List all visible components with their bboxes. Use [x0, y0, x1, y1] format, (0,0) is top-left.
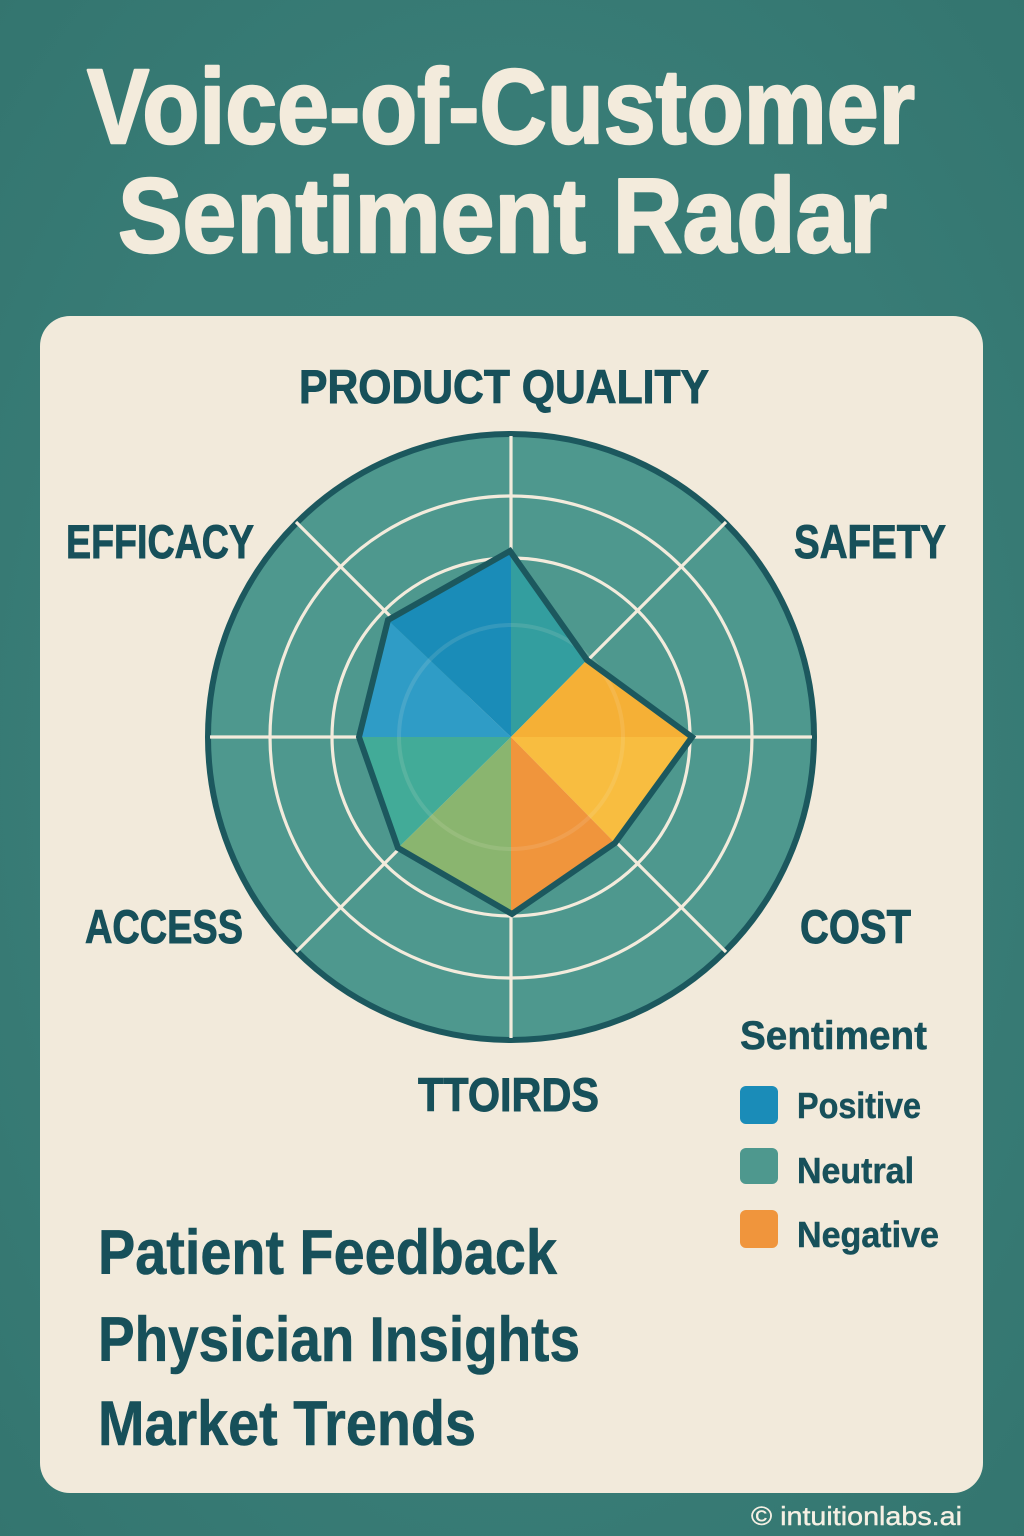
title: Voice-of-Customer	[87, 48, 915, 166]
axis labels: ACCESS	[85, 900, 243, 953]
data sources list: Physician Insights	[98, 1305, 580, 1375]
radar background disc	[208, 434, 814, 1040]
data sources list: Market Trends	[98, 1389, 476, 1459]
axis labels	[66, 360, 946, 1121]
faint inner ring	[399, 625, 623, 849]
legend item: negative	[740, 1210, 939, 1255]
legend item: neutral: Neutral	[797, 1150, 914, 1191]
title	[87, 48, 915, 275]
radar chart	[208, 434, 814, 1040]
axis labels: EFFICACY	[66, 515, 254, 568]
legend item: negative: Negative	[797, 1214, 939, 1255]
sentiment wedges	[359, 551, 692, 914]
footer credit: © intuitionlabs.ai	[751, 1501, 962, 1531]
axis labels: TTOIRDS	[418, 1068, 599, 1121]
legend item: neutral	[740, 1148, 914, 1191]
data sources list	[98, 1218, 580, 1459]
radar grid	[210, 436, 812, 1038]
legend	[740, 1014, 939, 1255]
axis labels: PRODUCT QUALITY	[299, 360, 709, 413]
data sources list: Patient Feedback	[98, 1218, 558, 1288]
axis labels: SAFETY	[794, 515, 946, 568]
axis labels: COST	[800, 900, 911, 953]
panel: radar card	[40, 316, 983, 1493]
legend title: Sentiment	[740, 1014, 927, 1058]
legend item: positive	[740, 1085, 921, 1126]
title: Sentiment Radar	[118, 157, 887, 275]
radar polygon outline	[359, 551, 692, 914]
legend item: positive: Positive	[797, 1085, 921, 1126]
